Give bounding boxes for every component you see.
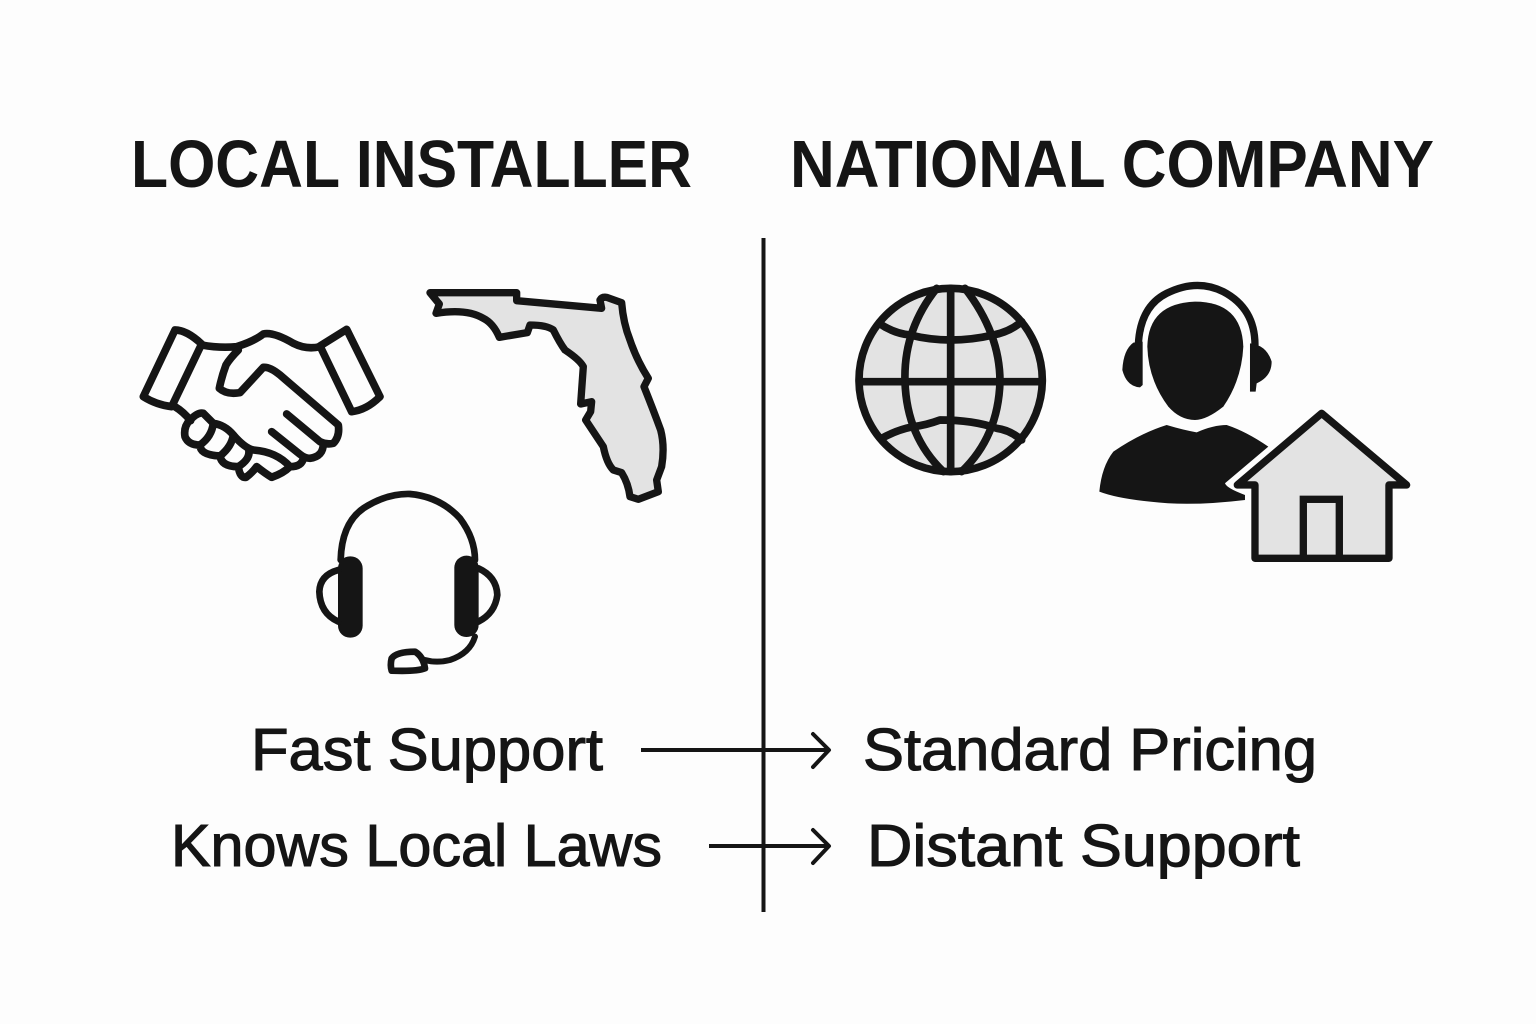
agent headphones xyxy=(1122,285,1272,392)
label: fast support: Fast Support xyxy=(251,717,603,783)
heading: local installer: LOCAL INSTALLER xyxy=(131,127,692,202)
icon: handshake xyxy=(143,329,380,477)
icon: globe xyxy=(859,288,1042,472)
arrow: fast support to standard pricing xyxy=(641,734,829,767)
house xyxy=(1237,413,1407,558)
icon: support agent with house xyxy=(1099,285,1407,558)
label: knows local laws: Knows Local Laws xyxy=(171,813,662,879)
agent head xyxy=(1147,302,1243,420)
heading: national company: NATIONAL COMPANY xyxy=(790,127,1434,202)
label: standard pricing: Standard Pricing xyxy=(863,717,1317,783)
agent shoulders xyxy=(1099,425,1268,504)
icon: headset xyxy=(319,494,497,671)
arrow: knows local laws to distant support xyxy=(709,830,829,863)
icon: florida map xyxy=(430,293,663,499)
center divider line xyxy=(762,238,766,912)
label: distant support: Distant Support xyxy=(867,813,1300,879)
